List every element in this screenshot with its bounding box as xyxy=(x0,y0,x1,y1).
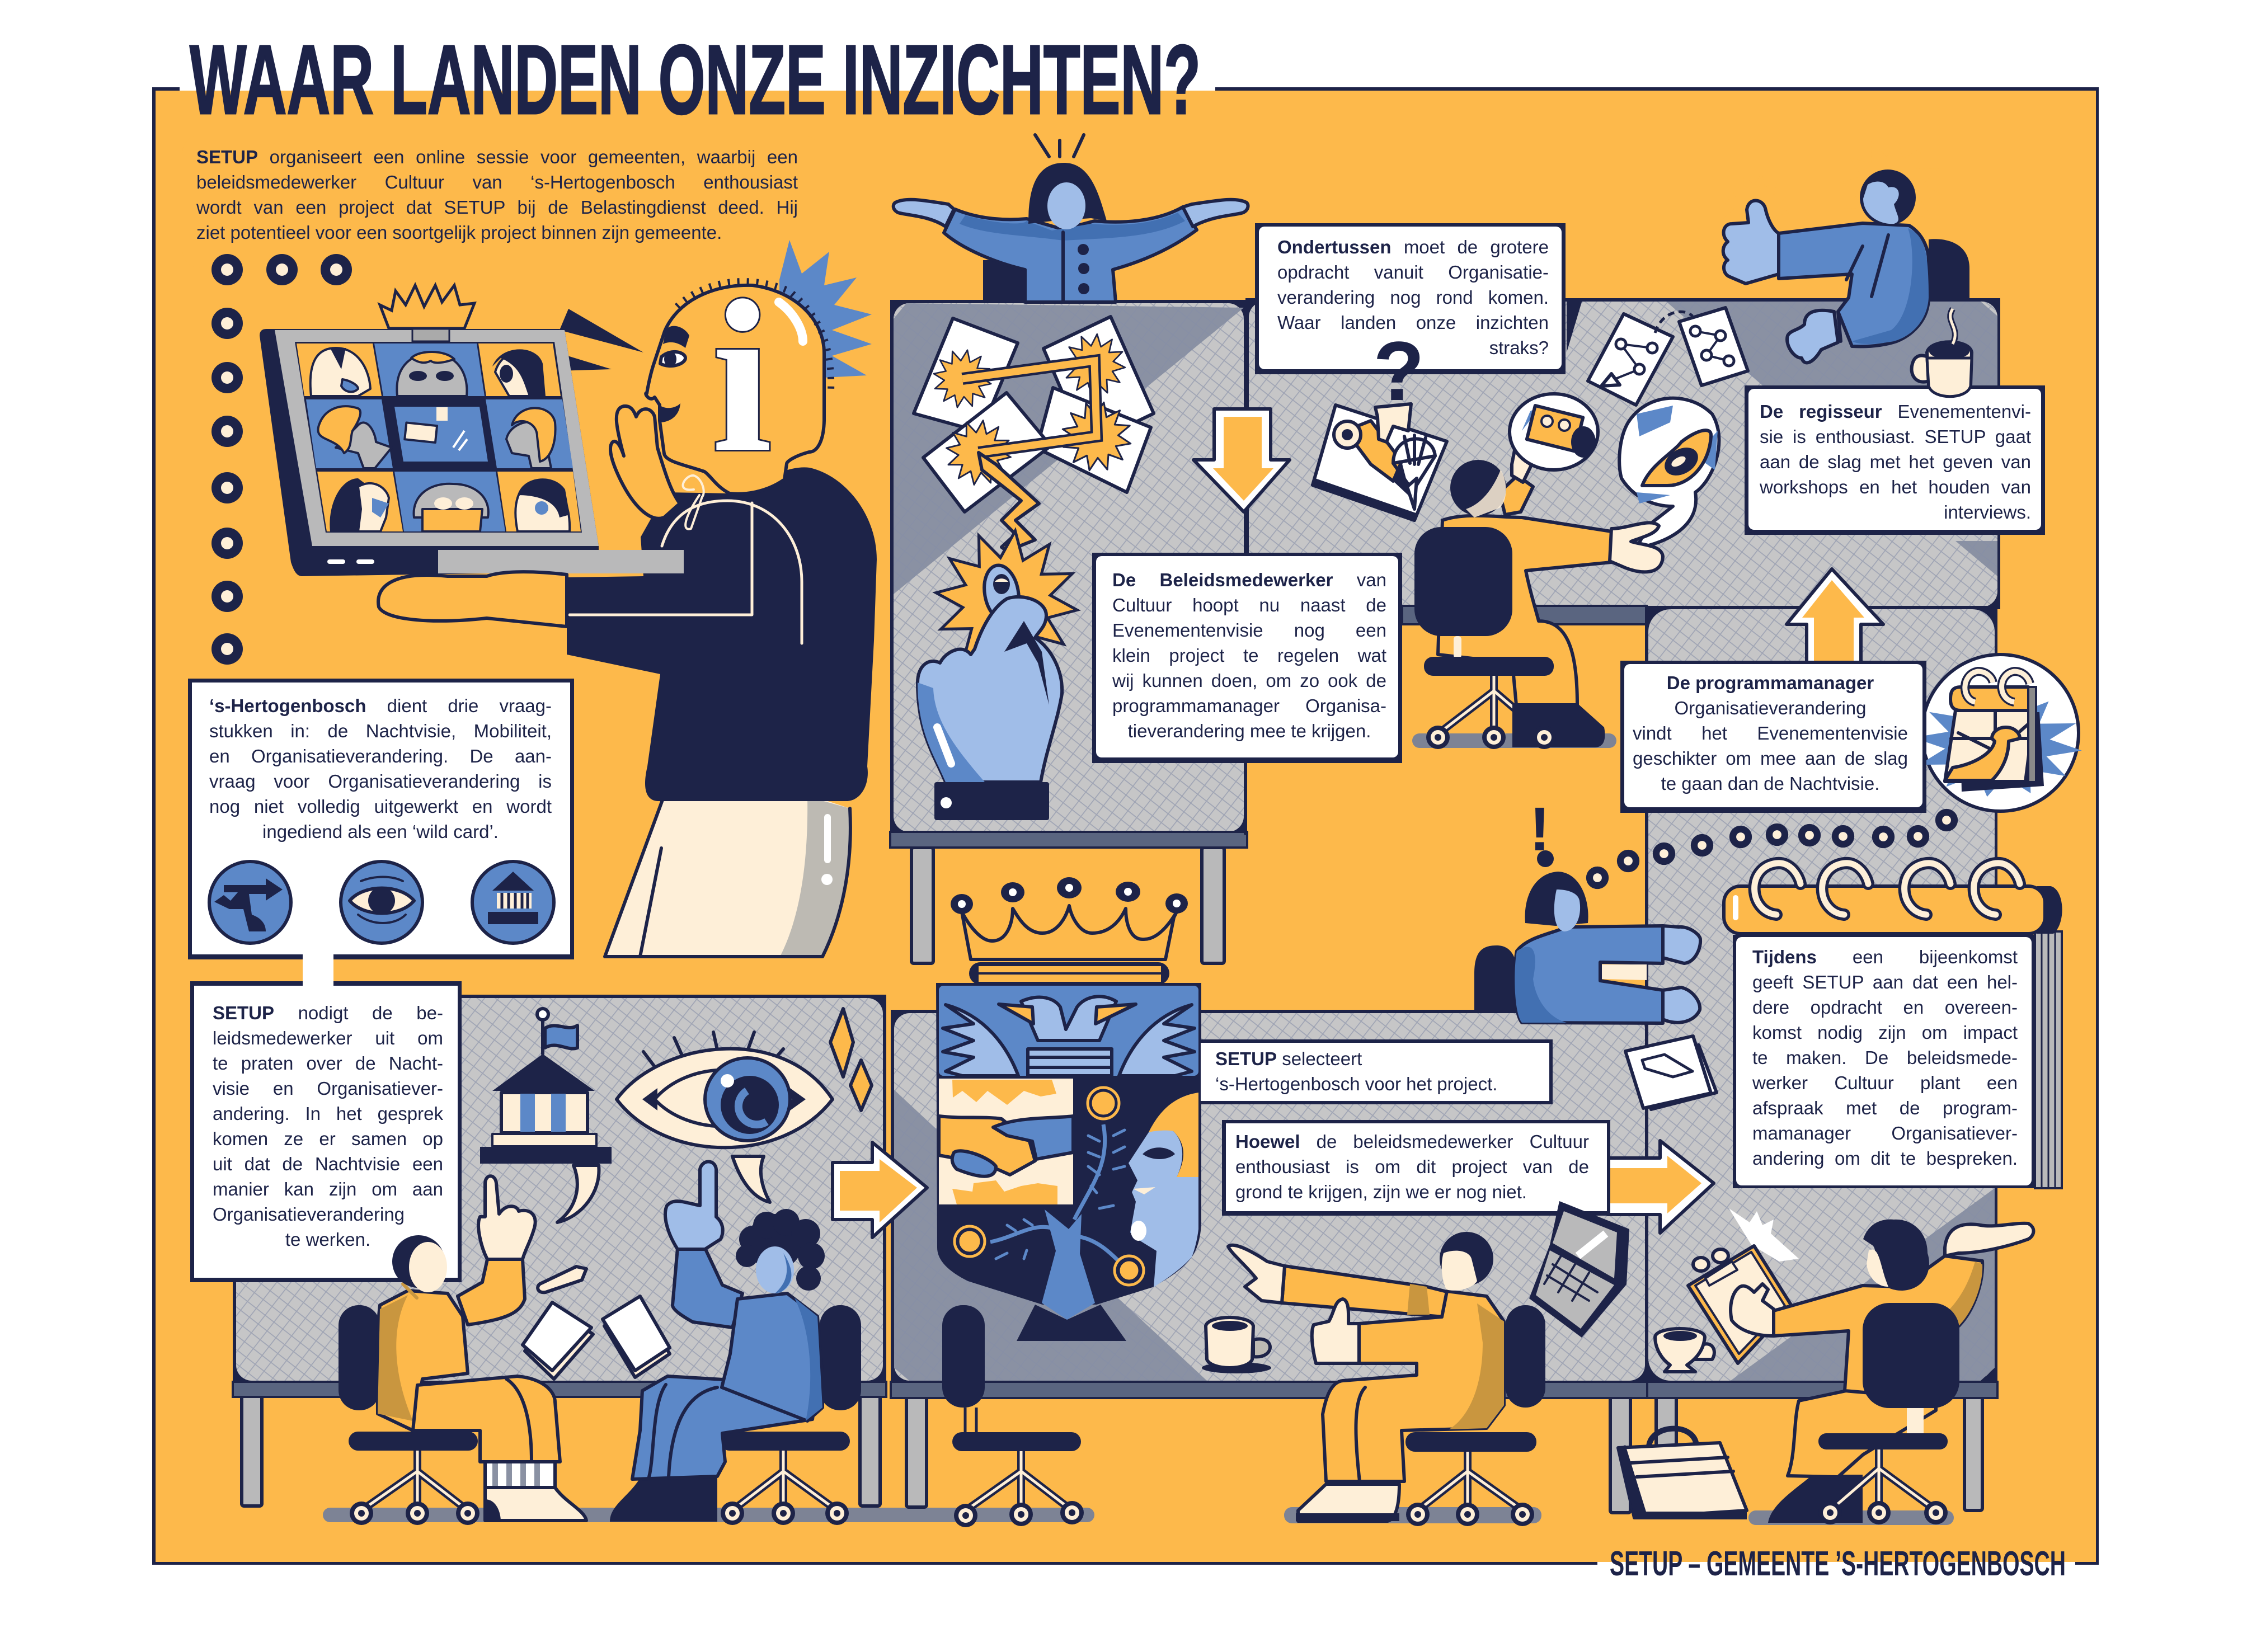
wings xyxy=(943,996,1195,1076)
head overlapping callout xyxy=(392,1235,447,1292)
parachute xyxy=(1393,435,1435,509)
white burst xyxy=(1729,1208,1799,1262)
callout: 's-Hertogenbosch with icons xyxy=(188,679,574,985)
figure: woman thinking xyxy=(1474,872,1700,1023)
intro callout: beleidsmedewerker Cultuur van ‘s-Hertogenbosch enthousiast xyxy=(196,172,798,192)
head xyxy=(1525,872,1588,926)
notebook: Tijdens: andering om dit te bespreken. xyxy=(1752,1148,2018,1169)
question mark: ? xyxy=(1373,324,1425,418)
callout: De Beleidsmedewerker xyxy=(1092,553,1402,763)
callout: SETUP nodigt: Organisatieverandering xyxy=(213,1204,405,1225)
shoes xyxy=(1298,1484,1399,1521)
head xyxy=(1860,170,1916,225)
notebook: Tijdens: te maken. De beleidsmede- xyxy=(1752,1047,2018,1068)
clipboard xyxy=(1688,1246,1792,1363)
laptop shell xyxy=(260,329,599,576)
figure: woman writing with clipboard xyxy=(1688,1208,2033,1524)
cup over callout xyxy=(1927,358,1972,397)
callout: SETUP nodigt: visie en Organisatiever- xyxy=(213,1078,443,1099)
hair ticks xyxy=(677,281,831,392)
hands xyxy=(1663,926,1700,963)
callout: De Beleidsmedewerker: wij kunnen doen, om zo ook de xyxy=(1112,670,1386,691)
background panel xyxy=(156,91,2096,1562)
torso and sleeve xyxy=(567,467,877,801)
exclamation mark: ! xyxy=(1530,795,1550,864)
callout: De programmamanager: De programmamanager xyxy=(1667,672,1874,693)
callout: SETUP nodigt: leidsmedewerker uit om xyxy=(213,1028,443,1048)
icon: building xyxy=(472,862,554,943)
hair xyxy=(736,1209,825,1291)
notebook: Tijdens: Tijdens een bijeenkomst xyxy=(1752,947,2018,967)
callout: 's-Hertogenbosch with icons: nog niet volledig uitgewerkt en wordt xyxy=(209,796,552,817)
thumb hand xyxy=(1723,200,1779,284)
handshake panel xyxy=(939,1079,1073,1204)
hair xyxy=(1863,1220,1929,1291)
callout: Ondertussen: verandering nog rond komen. xyxy=(1277,287,1549,308)
arrow: right to notebook xyxy=(1607,1141,1714,1233)
raised hand xyxy=(1945,1223,2033,1256)
legs xyxy=(413,1376,560,1462)
tree and medals xyxy=(955,1088,1144,1320)
notebook: Tijdens: geeft SETUP aan dat een hel- xyxy=(1752,972,2018,992)
tooth xyxy=(557,1165,599,1222)
hand xyxy=(478,1176,535,1259)
panel: bottom centre wall xyxy=(891,1010,1648,1398)
torso and arms xyxy=(1774,1256,1982,1399)
torso xyxy=(377,1291,468,1430)
figure: woman presenting xyxy=(894,135,1248,302)
callout: Hoewel xyxy=(1222,1120,1610,1216)
callout: De programmamanager: geschikter om mee aan de slag xyxy=(1633,748,1908,769)
face in profile xyxy=(1129,1093,1198,1287)
shield xyxy=(936,983,1201,1305)
hand raised xyxy=(610,406,680,519)
chair xyxy=(1414,527,1512,636)
intro callout xyxy=(182,135,820,268)
callout: SETUP nodigt: te werken. xyxy=(285,1229,370,1250)
figure: orange person talking xyxy=(339,1176,586,1525)
callout: SETUP selecteert: SETUP selecteert xyxy=(1215,1048,1362,1069)
callout: SETUP nodigt: SETUP nodigt de be- xyxy=(213,1003,443,1023)
sketch note xyxy=(1625,1036,1717,1109)
callout: Hoewel: enthousiast is om dit project van de xyxy=(1235,1156,1589,1177)
video tile faces xyxy=(297,343,581,531)
shoes xyxy=(1512,703,1605,747)
arrow: right to coat of arms xyxy=(833,1142,927,1237)
callout: 's-Hertogenbosch with icons: stukken in: de Nachtvisie, Mobiliteit, xyxy=(209,721,552,741)
notebook: Tijdens: afspraak met de program- xyxy=(1752,1098,2018,1118)
callout: De regisseur: De regisseur Evenementenvi- xyxy=(1760,401,2031,422)
panel: upper left wall xyxy=(890,300,1247,848)
notebook: Tijdens xyxy=(1724,863,2062,1188)
lightning xyxy=(979,453,1039,551)
coffee cup xyxy=(1912,309,1972,397)
pencil xyxy=(1334,421,1411,498)
torso xyxy=(722,1293,822,1421)
raised arm xyxy=(673,1248,742,1328)
notebook: Tijdens: dere opdracht en overeen- xyxy=(1752,997,2018,1018)
tea cup xyxy=(1655,1329,1714,1372)
big eye xyxy=(617,1009,872,1202)
intro callout: wordt van een project dat SETUP bij de Belastingdienst deed. Hij xyxy=(196,197,798,218)
notebook: Tijdens: mamanager Organisatiever- xyxy=(1752,1123,2018,1143)
briefcase xyxy=(1618,1429,1747,1519)
title: WAAR LANDEN ONZE INZICHTEN? xyxy=(190,25,1201,135)
calendar medallion xyxy=(1903,655,2092,811)
chair post xyxy=(1830,1449,1936,1510)
callout: SETUP nodigt: manier kan zijn om aan xyxy=(213,1179,443,1199)
callout: De regisseur: aan de slag met het geven van xyxy=(1760,451,2031,472)
webcam xyxy=(412,329,449,341)
callout: SETUP nodigt: uit dat de Nachtvisie een xyxy=(213,1154,443,1174)
callout: SETUP nodigt: komen ze er samen op xyxy=(213,1128,443,1149)
decorative corner stars xyxy=(156,91,2096,1562)
shoes xyxy=(610,1477,717,1522)
callout: De Beleidsmedewerker: Evenementenvisie nog een xyxy=(1112,620,1386,641)
thumbs up hand xyxy=(1312,1299,1359,1363)
callout: De regisseur: sie is enthousiast. SETUP gaat xyxy=(1760,426,2031,447)
extended hand xyxy=(1610,523,1663,572)
graph cards xyxy=(1588,308,1748,405)
callout: De Beleidsmedewerker: Cultuur hoopt nu naast de xyxy=(1112,595,1386,615)
highlight xyxy=(779,302,803,341)
shoes xyxy=(1768,1475,1863,1523)
shoes xyxy=(485,1488,586,1521)
large thought bubble xyxy=(1619,398,1719,548)
legs xyxy=(632,1376,817,1479)
callout: De regisseur: workshops en het houden van xyxy=(1760,477,2031,497)
writing hand xyxy=(1731,1284,1774,1336)
ring dots: connection path from callout to panel xyxy=(211,254,352,665)
notebook rings xyxy=(1755,863,2020,915)
callout: De regisseur: interviews. xyxy=(1944,502,2031,523)
head xyxy=(1450,460,1506,516)
callout: SETUP selecteert xyxy=(1201,1039,1553,1104)
desk legs xyxy=(242,848,1982,1513)
body xyxy=(1438,516,1611,705)
callout: Ondertussen: Waar landen onze inzichten xyxy=(1277,312,1549,333)
callout: De Beleidsmedewerker: programmamanager Organisa- xyxy=(1112,695,1386,716)
chair back xyxy=(1863,1303,1959,1408)
callout: De programmamanager: vindt het Evenementenvisie xyxy=(1633,723,1908,743)
callout: Hoewel: grond te krijgen, zijn we er nog niet. xyxy=(1235,1182,1527,1202)
callout: Hoewel: Hoewel de beleidsmedewerker Cultuur xyxy=(1235,1131,1589,1152)
chair xyxy=(820,1305,861,1410)
callout: 's-Hertogenbosch with icons: ingediend als een ‘wild card’. xyxy=(262,821,499,842)
rays xyxy=(1035,135,1084,157)
screen xyxy=(295,342,582,533)
callout: SETUP nodigt: andering. In het gesprek xyxy=(213,1103,443,1124)
hand pressing button with burst xyxy=(918,522,1086,820)
callout: De regisseur xyxy=(1745,385,2045,535)
figure: blue person talking xyxy=(610,1161,861,1525)
callout: De Beleidsmedewerker: klein project te regelen wat xyxy=(1112,645,1386,666)
figure: person pointing xyxy=(1228,1232,1545,1526)
idea papers with connections xyxy=(914,317,1154,551)
chair xyxy=(339,1305,380,1410)
callout: Ondertussen: straks? xyxy=(1489,337,1549,358)
crown behind laptop xyxy=(380,285,474,328)
pointing arm xyxy=(1282,1266,1449,1317)
chair xyxy=(1506,1305,1545,1408)
panel: upper right wall xyxy=(1245,298,2000,624)
sleeve outline xyxy=(570,501,802,643)
callout: Ondertussen xyxy=(1255,223,1566,374)
building on shelf xyxy=(480,1009,612,1222)
legs xyxy=(1788,1391,1936,1477)
speech lines xyxy=(558,309,643,371)
icon: mobility xyxy=(209,862,291,943)
arrow: up xyxy=(1787,569,1883,663)
panel: right column wall xyxy=(1645,606,1997,1398)
hand with bubble xyxy=(1512,446,1536,482)
callout: 's-Hertogenbosch with icons: vraag voor Organisatieverandering is xyxy=(209,771,552,792)
drawing on paper with question mark xyxy=(1313,324,1447,520)
face details xyxy=(660,326,704,529)
icon: information letter: i xyxy=(712,256,772,497)
small thought bubble xyxy=(1510,394,1598,470)
pencil and notebooks on wall xyxy=(523,1267,670,1379)
callout: De Beleidsmedewerker: De Beleidsmedewerker van xyxy=(1112,570,1386,590)
body xyxy=(1323,1291,1504,1481)
hand holding laptop xyxy=(378,572,567,627)
intro callout: ziet potentieel voor een soortgelijk project binnen zijn gemeente. xyxy=(196,222,722,243)
callout: 's-Hertogenbosch with icons: en Organisatieverandering. De aan- xyxy=(209,746,552,766)
callout: De programmamanager xyxy=(1620,661,1926,813)
laptop on wall xyxy=(1529,1201,1629,1338)
head xyxy=(646,285,824,494)
pedestal xyxy=(1017,1305,1126,1341)
callout: Ondertussen: Ondertussen moet de grotere xyxy=(1277,237,1549,257)
callout: Ondertussen: opdracht vanuit Organisatie- xyxy=(1277,262,1549,283)
notebook: Tijdens: komst nodig zijn om impact xyxy=(1752,1022,2018,1043)
skirt xyxy=(605,794,850,957)
empty chair xyxy=(942,1305,1084,1527)
intro callout: SETUP organiseert een online sessie voor gemeenten, waarbij een xyxy=(196,147,798,167)
head xyxy=(1440,1232,1493,1286)
callout: De Beleidsmedewerker: tieverandering mee te krijgen. xyxy=(1128,721,1371,741)
coat of arms xyxy=(936,877,1201,1341)
lower hand xyxy=(1787,310,1838,363)
head xyxy=(392,1235,445,1288)
callout: 's-Hertogenbosch with icons: ‘s-Hertogenbosch dient drie vraag- xyxy=(209,695,552,716)
figure: information officer xyxy=(558,240,877,957)
icon: blue burst behind head xyxy=(779,240,872,378)
ring dots: thought path xyxy=(1537,809,1958,889)
face xyxy=(756,1246,794,1293)
laptop with video call xyxy=(260,285,684,576)
callout: SETUP nodigt: te praten over de Nacht- xyxy=(213,1053,443,1074)
callout: SETUP nodigt xyxy=(190,951,462,1282)
socks xyxy=(485,1460,555,1488)
icon: eye xyxy=(341,862,422,943)
arrow: down xyxy=(1193,409,1290,834)
raised arm xyxy=(458,1259,525,1325)
callout: SETUP selecteert: ‘s-Hertogenbosch voor het project. xyxy=(1215,1074,1497,1094)
figure: seated person with thought bubbles xyxy=(1414,394,1719,749)
figure: director giving thumbs up xyxy=(1715,131,1972,397)
crown xyxy=(951,877,1188,985)
coffee mug xyxy=(1202,1317,1271,1373)
callout: De programmamanager: te gaan dan de Nachtvisie. xyxy=(1661,773,1879,794)
pointing hand xyxy=(1375,404,1411,442)
callout: De programmamanager: Organisatieverandering xyxy=(1674,698,1867,718)
notebook: Tijdens: werker Cultuur plant een xyxy=(1752,1072,2018,1093)
floor shadows xyxy=(323,733,1954,1525)
panel: bottom left wall xyxy=(233,995,886,1397)
frame border xyxy=(154,89,2097,1563)
hand xyxy=(665,1161,723,1249)
